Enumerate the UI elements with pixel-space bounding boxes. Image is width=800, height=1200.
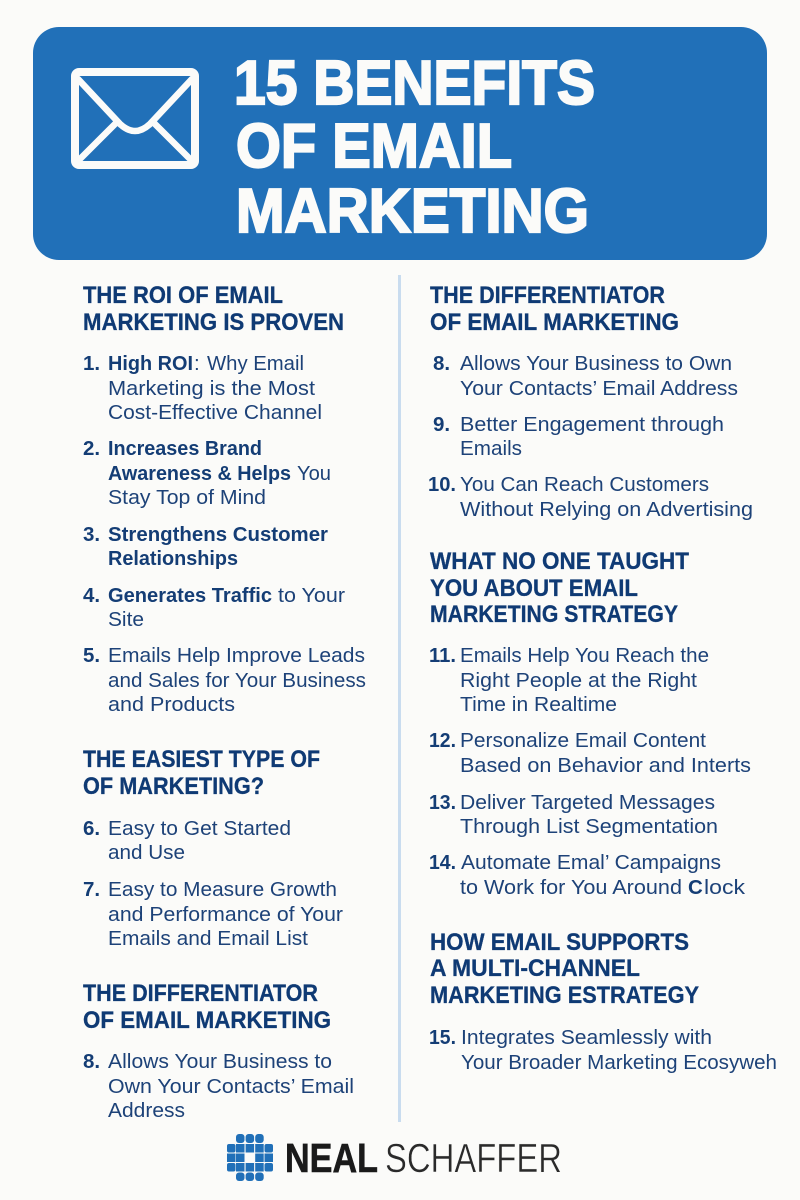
item 7 bbox=[83, 878, 343, 950]
panel: right column bbox=[428, 282, 777, 1074]
item 8, left: 8. bbox=[83, 1050, 100, 1073]
heading: ROI of email marketing: THE ROI OF EMAIL bbox=[83, 282, 283, 309]
item 7: 7. bbox=[83, 878, 100, 901]
item 7: Emails and Email List bbox=[108, 927, 308, 950]
heading: what no one taught you: MARKETING STRATEGY bbox=[430, 601, 678, 628]
item 10 bbox=[428, 473, 753, 521]
item 6 bbox=[83, 817, 291, 864]
item 2 bbox=[83, 437, 331, 509]
item 1: High ROI bbox=[108, 352, 193, 375]
item 7: Easy to Measure Growth bbox=[108, 878, 337, 901]
item 8, right: Your Contacts’ Email Address bbox=[460, 377, 738, 400]
item 12: Personalize Email Content bbox=[460, 729, 706, 752]
item 14 bbox=[429, 851, 746, 899]
title: 15 BENEFITS bbox=[234, 49, 595, 118]
heading: multi-channel strategy: A MULTI-CHANNEL bbox=[430, 955, 640, 982]
item 9 bbox=[433, 413, 724, 460]
item 1: 1. bbox=[83, 352, 100, 375]
item 6: Easy to Get Started bbox=[108, 817, 291, 840]
title: OF EMAIL bbox=[236, 112, 512, 181]
heading: differentiator, left: OF EMAIL MARKETING bbox=[83, 1007, 331, 1034]
icon: envelope bbox=[75, 72, 195, 165]
item 1: Marketing is the Most bbox=[108, 377, 315, 400]
item 3: Relationships bbox=[108, 547, 238, 570]
wordmark bbox=[285, 1135, 562, 1181]
item 13: Through List Segmentation bbox=[460, 815, 718, 838]
item 8, left: Allows Your Business to bbox=[108, 1050, 332, 1073]
item 12: Based on Behavior and Interts bbox=[460, 754, 751, 777]
icon: logo grid bbox=[227, 1134, 273, 1181]
item 10: Without Relying on Advertising bbox=[460, 498, 753, 521]
heading: easiest type of marketing bbox=[83, 746, 320, 800]
item 3 bbox=[83, 523, 328, 570]
panel: left column bbox=[83, 282, 366, 1122]
heading: easiest type of marketing: OF MARKETING? bbox=[83, 773, 264, 800]
item 14: 14. bbox=[429, 851, 456, 874]
title: MARKETING bbox=[236, 177, 589, 246]
item 15 bbox=[429, 1026, 777, 1074]
item 14: C bbox=[688, 876, 703, 899]
item 8, right: 8. bbox=[433, 352, 450, 375]
item 11 bbox=[429, 644, 709, 716]
item 2: Stay Top of Mind bbox=[108, 486, 266, 509]
item 4 bbox=[83, 584, 345, 631]
title bbox=[234, 49, 595, 246]
item 8, right: Allows Your Business to Own bbox=[460, 352, 732, 375]
item 8, left: Own Your Contacts’ Email bbox=[108, 1075, 354, 1098]
item 5: 5. bbox=[83, 644, 100, 667]
item 2: Awareness & Helps bbox=[108, 462, 291, 485]
heading: what no one taught you: WHAT NO ONE TAUGHT bbox=[430, 548, 689, 575]
item 11: Emails Help You Reach the bbox=[460, 644, 709, 667]
heading: multi-channel strategy: HOW EMAIL SUPPORTS bbox=[430, 929, 689, 956]
item 14: to Work for You Around bbox=[460, 876, 682, 899]
item 4: Site bbox=[108, 608, 144, 631]
heading: differentiator, left bbox=[83, 980, 331, 1034]
heading: differentiator, right bbox=[430, 282, 679, 336]
heading: multi-channel strategy: MARKETING ESTRATEGY bbox=[430, 982, 699, 1009]
item 12: 12. bbox=[429, 729, 456, 752]
item 6: 6. bbox=[83, 817, 100, 840]
item 8, left: Address bbox=[108, 1099, 185, 1122]
item 3: Strengthens Customer bbox=[108, 523, 328, 546]
item 13: Deliver Targeted Messages bbox=[460, 791, 715, 814]
item 12 bbox=[429, 729, 751, 777]
item 15: Your Broader Marketing Ecosyweh bbox=[461, 1051, 777, 1074]
item 5 bbox=[83, 644, 366, 716]
wordmark: NEAL bbox=[285, 1135, 378, 1181]
item 1: : bbox=[194, 352, 200, 375]
heading: differentiator, left: THE DIFFERENTIATOR bbox=[83, 980, 318, 1007]
item 8, right bbox=[433, 352, 738, 400]
item 14: lock bbox=[704, 876, 746, 899]
item 9: Better Engagement through bbox=[460, 413, 724, 436]
item 5: Emails Help Improve Leads bbox=[108, 644, 365, 667]
item 2: Increases Brand bbox=[108, 437, 262, 460]
heading: differentiator, right: THE DIFFERENTIATOR bbox=[430, 282, 665, 309]
item 13: 13. bbox=[429, 791, 456, 814]
item 10: 10. bbox=[428, 473, 456, 496]
item 15: Integrates Seamlessly with bbox=[461, 1026, 712, 1049]
item 2: 2. bbox=[83, 437, 100, 460]
heading: ROI of email marketing bbox=[83, 282, 344, 336]
column divider bbox=[398, 275, 401, 1122]
item 4: Generates Traffic bbox=[108, 584, 272, 607]
item 14: Automate Emal’ Campaigns bbox=[461, 851, 721, 874]
item 11: 11. bbox=[429, 644, 456, 667]
item 1 bbox=[83, 352, 322, 424]
item 4: to Your bbox=[278, 584, 345, 607]
wordmark: SCHAFFER bbox=[385, 1135, 562, 1181]
heading: ROI of email marketing: MARKETING IS PROVEN bbox=[83, 309, 344, 336]
item 8, left bbox=[83, 1050, 354, 1122]
item 7: and Performance of Your bbox=[108, 903, 343, 926]
item 5: and Products bbox=[108, 693, 235, 716]
heading: what no one taught you bbox=[430, 548, 689, 628]
logo: Neal Schaffer bbox=[227, 1134, 562, 1181]
heading: differentiator, right: OF EMAIL MARKETING bbox=[430, 309, 679, 336]
item 10: You Can Reach Customers bbox=[460, 473, 709, 496]
item 4: 4. bbox=[83, 584, 100, 607]
item 9: 9. bbox=[433, 413, 450, 436]
item 13 bbox=[429, 791, 718, 838]
item 9: Emails bbox=[460, 437, 522, 460]
heading: easiest type of marketing: THE EASIEST TYPE OF bbox=[83, 746, 320, 773]
item 1: Why Email bbox=[207, 352, 304, 375]
item 1: Cost-Effective Channel bbox=[108, 401, 322, 424]
item 6: and Use bbox=[108, 841, 185, 864]
item 3: 3. bbox=[83, 523, 100, 546]
item 15: 15. bbox=[429, 1026, 456, 1049]
item 11: Time in Realtime bbox=[460, 693, 617, 716]
item 2: You bbox=[297, 462, 331, 485]
item 5: and Sales for Your Business bbox=[108, 669, 366, 692]
heading: what no one taught you: YOU ABOUT EMAIL bbox=[430, 575, 638, 602]
heading: multi-channel strategy bbox=[430, 929, 699, 1009]
header banner bbox=[33, 27, 767, 260]
item 11: Right People at the Right bbox=[460, 669, 697, 692]
